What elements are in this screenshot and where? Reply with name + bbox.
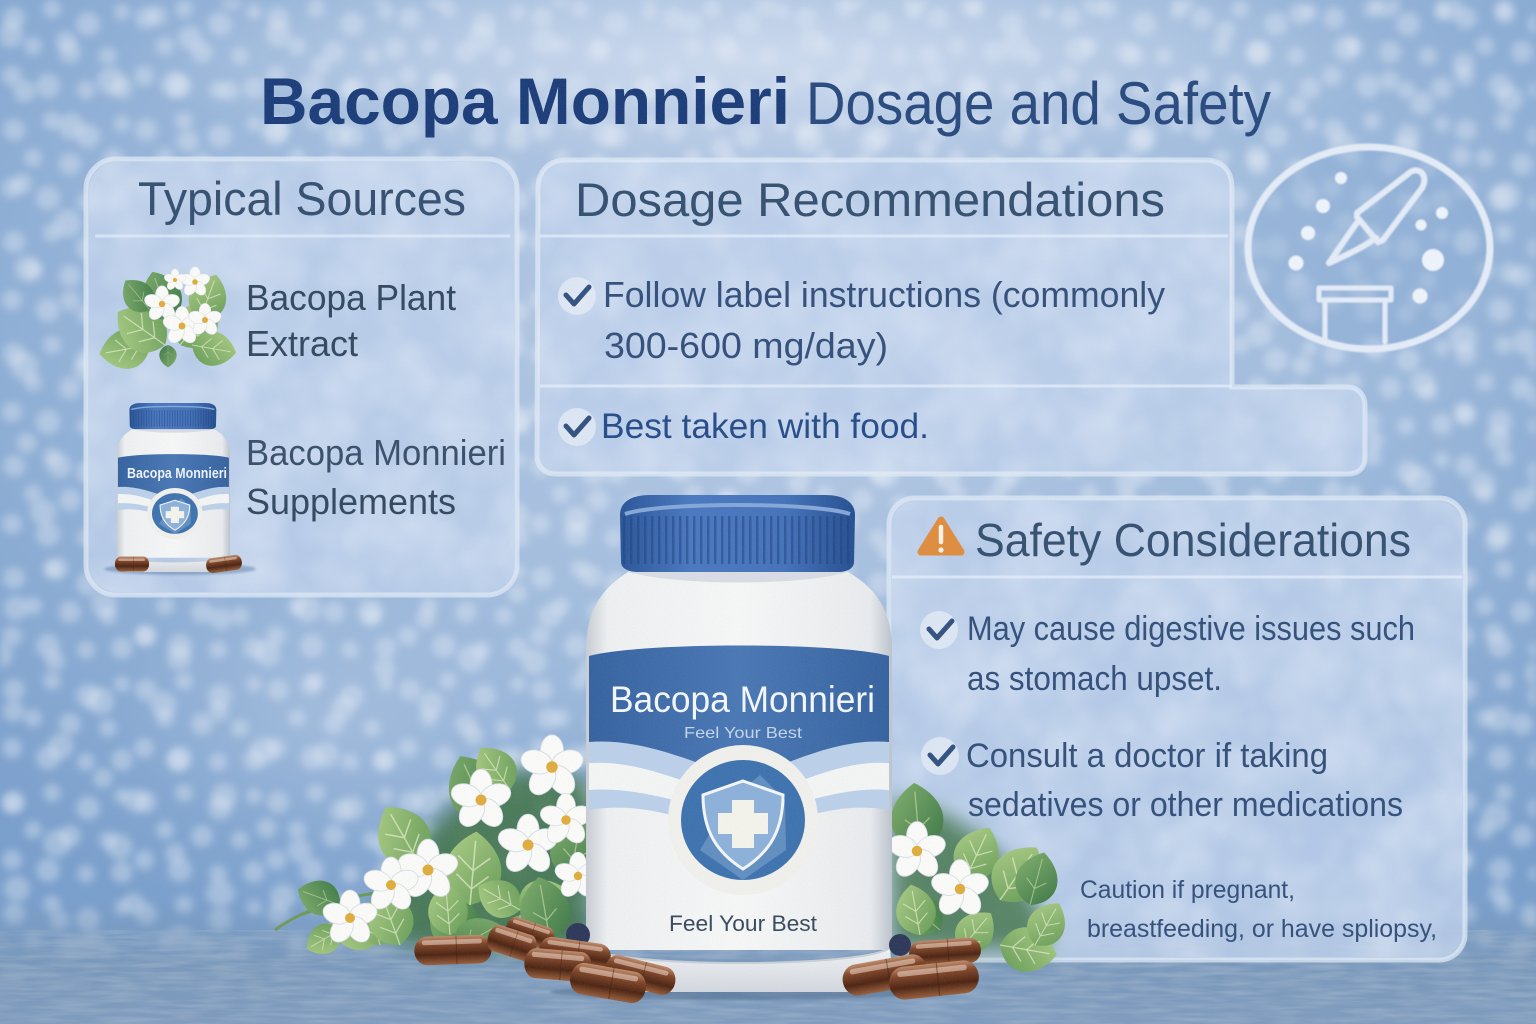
text: with food: Best taken with food. bbox=[601, 407, 929, 446]
text: bacopa plant extract bbox=[246, 277, 456, 364]
bottle label text: Bacopa Monnieri bbox=[610, 679, 875, 720]
text: consult a doctor bbox=[966, 737, 1403, 824]
text: dose guidance: 300-600 mg/day) bbox=[604, 325, 888, 366]
icon: warning triangle bbox=[921, 520, 961, 553]
foliage: right cluster bbox=[886, 781, 1075, 977]
text: digestive issues: May cause digestive issues such bbox=[967, 610, 1415, 648]
title bbox=[260, 64, 1271, 138]
heading: safety considerations: Safety Considerations bbox=[975, 514, 1411, 566]
text: consult a doctor: sedatives or other medications bbox=[968, 786, 1403, 824]
panel: safety considerations bbox=[889, 498, 1465, 960]
text: consult a doctor: Consult a doctor if taking bbox=[966, 737, 1328, 775]
icon: check 1 bbox=[558, 277, 596, 315]
text: digestive issues bbox=[967, 610, 1415, 698]
panel: typical sources bbox=[86, 159, 517, 595]
caution text: Caution if pregnant, bbox=[1080, 876, 1295, 904]
flowers bbox=[886, 822, 991, 919]
text: bacopa monnieri supplements: Bacopa Monnieri bbox=[246, 432, 506, 473]
text: digestive issues: as stomach upset. bbox=[967, 660, 1222, 698]
text: dose guidance bbox=[603, 274, 1165, 366]
text: bacopa monnieri supplements: Supplements bbox=[246, 481, 456, 522]
icon: check 3 bbox=[920, 611, 958, 649]
caution text bbox=[1080, 876, 1437, 943]
icon: small supplement bottle: Bacopa Monnieri bbox=[127, 466, 227, 482]
bottle label text: Feel Your Best bbox=[669, 911, 817, 936]
title: Bacopa Monnieri bbox=[260, 64, 790, 138]
flowers bbox=[320, 735, 603, 947]
caution text: breastfeeding, or have spliopsy, bbox=[1087, 915, 1437, 943]
icon: bacopa plant bbox=[96, 265, 239, 373]
icon: small supplement bottle bbox=[104, 403, 256, 575]
icon: check 2 bbox=[558, 408, 596, 446]
icon: dropper and jar badge bbox=[1248, 147, 1490, 349]
capsules bbox=[414, 915, 982, 1005]
panel: dosage recommendations bbox=[537, 160, 1365, 474]
heading: typical sources: Typical Sources bbox=[138, 172, 466, 225]
bottle label text bbox=[610, 679, 875, 936]
bottle bbox=[550, 495, 930, 1000]
bottle label text: Feel Your Best bbox=[684, 725, 803, 742]
icon: check 4 bbox=[921, 737, 959, 775]
text: bacopa plant extract: Extract bbox=[246, 323, 358, 364]
foliage: left cluster bbox=[275, 735, 605, 967]
text: dose guidance: Follow label instructions (commonly bbox=[603, 274, 1165, 315]
title: Dosage and Safety bbox=[806, 70, 1271, 137]
text: bacopa plant extract: Bacopa Plant bbox=[246, 277, 456, 318]
text: bacopa monnieri supplements bbox=[246, 432, 506, 522]
heading: dosage recommendations: Dosage Recommendations bbox=[575, 173, 1165, 226]
